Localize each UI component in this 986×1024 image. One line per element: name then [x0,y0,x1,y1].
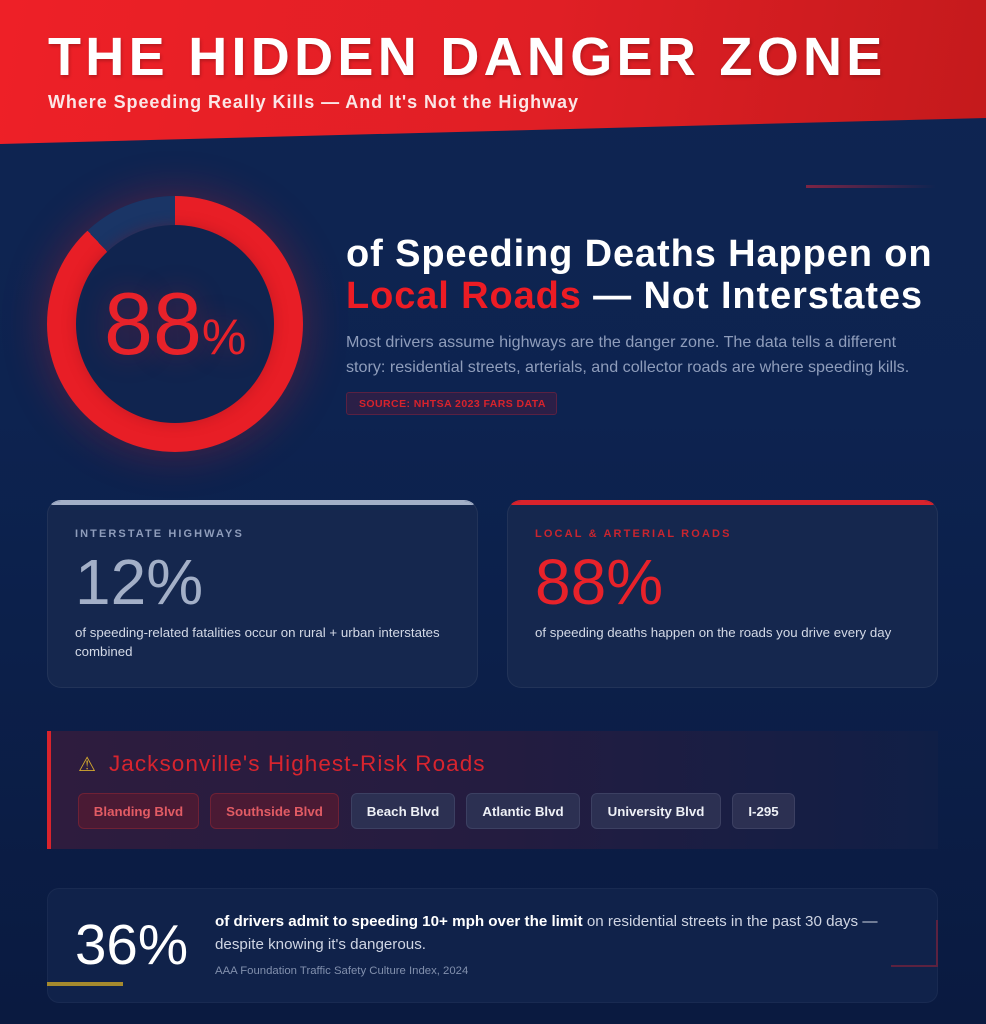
decorative line top right [806,185,936,188]
panel: driver statistic [47,888,938,1003]
subtitle: Where Speeding Really Kills — And It's Not the Highway [48,92,579,112]
donut chart: 88 percent [47,196,303,452]
hero description: story: residential streets, arterials, and collector roads are where speeding kills. [346,358,909,376]
road tag: Blanding Blvd [78,793,199,829]
card description: combined [75,644,133,659]
risk panel heading: Jacksonville's Highest-Risk Roads [109,751,486,776]
hero description: Most drivers assume highways are the danger zone. The data tells a different [346,333,896,351]
card label: LOCAL & ARTERIAL ROADS [535,528,732,540]
icon: warning triangle: ⚠ [78,752,96,776]
headline: Local Roads — Not Interstates [346,275,923,317]
road tag: Southside Blvd: Southside Blvd [226,804,323,819]
card: local and arterial roads [507,500,938,688]
headline: of Speeding Deaths Happen on [346,233,933,275]
card description [75,625,440,659]
panel: highest-risk roads [47,731,938,849]
header banner [0,0,986,144]
card accent bar [508,501,937,505]
stat source: AAA Foundation Traffic Safety Culture Index, 2024 [215,965,468,977]
gold accent bar [47,982,123,986]
stat description: despite knowing it's dangerous. [215,936,426,953]
card value: 12% [75,546,203,618]
card description: of speeding deaths happen on the roads you drive every day [535,625,891,640]
card label: INTERSTATE HIGHWAYS [75,528,244,540]
stat description: of drivers admit to speeding 10+ mph over the limit on residential streets in the past 30 days — [215,913,878,930]
road tag: Beach Blvd [351,793,455,829]
road tag: University Blvd [591,793,721,829]
headline [346,233,933,317]
stat description [215,913,878,953]
road tag: Atlantic Blvd [466,793,580,829]
road tag: Beach Blvd: Beach Blvd [367,804,439,819]
source badge: SOURCE: NHTSA 2023 FARS DATA [359,398,546,410]
card value: 88% [535,546,663,618]
road tag: Blanding Blvd: Blanding Blvd [94,804,183,819]
road tag: I-295 [732,793,795,829]
title: THE HIDDEN DANGER ZONE [48,27,887,87]
stat value: 36% [75,913,188,976]
decorative corner bracket [891,920,938,967]
road tag: I-295: I-295 [748,804,779,819]
hero description [346,333,909,376]
card: interstate highways [47,500,478,688]
donut value: 88% [104,274,246,373]
road tag: Southside Blvd [210,793,339,829]
road tag: Atlantic Blvd: Atlantic Blvd [482,804,564,819]
card accent bar [48,501,477,505]
card description: of speeding-related fatalities occur on rural + urban interstates [75,625,440,640]
donut centre [76,225,274,423]
source badge [346,392,557,415]
road tag: University Blvd: University Blvd [608,804,704,819]
